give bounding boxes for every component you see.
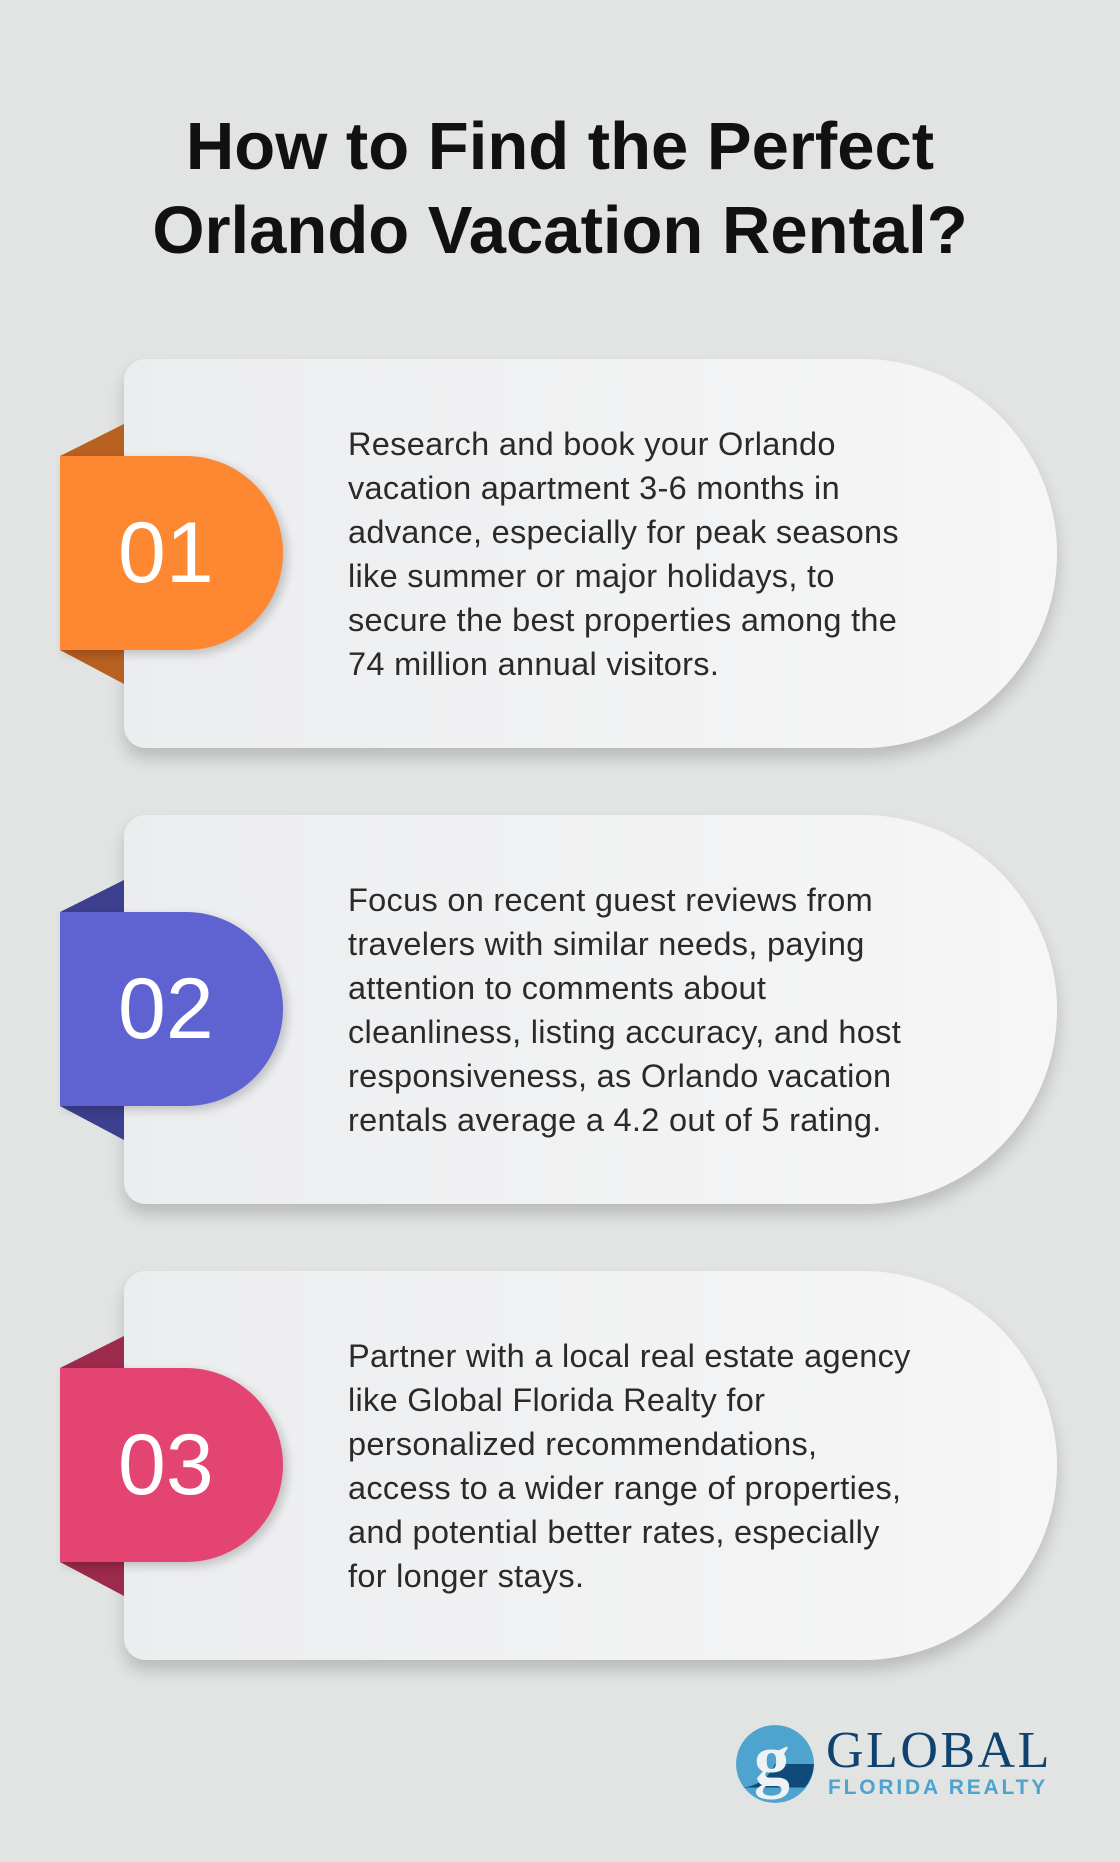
fold 1 [60,424,124,684]
title: Orlando Vacation Rental? [152,193,968,268]
text 2: rentals average a 4.2 out of 5 rating. [348,1102,882,1138]
text 1: 74 million annual visitors. [348,646,719,682]
text 3 [348,1338,911,1594]
card 3 [124,1271,1057,1660]
logo text: GLOBAL [826,1722,1052,1779]
card 1 [124,359,1057,748]
text 3: and potential better rates, especially [348,1514,880,1550]
badge 03 [60,1368,283,1562]
text 3: Partner with a local real estate agency [348,1338,911,1374]
panel: step 3 [60,1271,1064,1677]
panel: step 2 [60,815,1064,1221]
badge 01 [60,456,283,650]
text 3: for longer stays. [348,1558,584,1594]
text 3: like Global Florida Realty for [348,1382,765,1418]
badge 01: 01 [118,505,214,601]
text 3: access to a wider range of properties, [348,1470,901,1506]
text 2: attention to comments about [348,970,766,1006]
text 2 [348,882,901,1138]
text 1: secure the best properties among the [348,602,897,638]
title: How to Find the Perfect [186,109,934,184]
text 2: Focus on recent guest reviews from [348,882,873,918]
badge 03: 03 [118,1417,214,1513]
text 2: travelers with similar needs, paying [348,926,865,962]
logo icon [736,1724,814,1803]
text 1: Research and book your Orlando [348,426,836,462]
text 2: responsiveness, as Orlando vacation [348,1058,891,1094]
badge 02 [60,912,283,1106]
card 2 [124,815,1057,1204]
fold 2 [60,880,124,1140]
text 1: vacation apartment 3-6 months in [348,470,840,506]
text 1 [348,426,899,682]
panel: step 1 [60,359,1064,765]
text 2: cleanliness, listing accuracy, and host [348,1014,901,1050]
text 1: like summer or major holidays, to [348,558,835,594]
text 1: advance, especially for peak seasons [348,514,899,550]
fold 3 [60,1336,124,1596]
badge 02: 02 [118,961,214,1057]
title [152,109,968,268]
logo: FLORIDA REALTY [828,1776,1048,1799]
logo [736,1722,1052,1803]
text 3: personalized recommendations, [348,1426,817,1462]
